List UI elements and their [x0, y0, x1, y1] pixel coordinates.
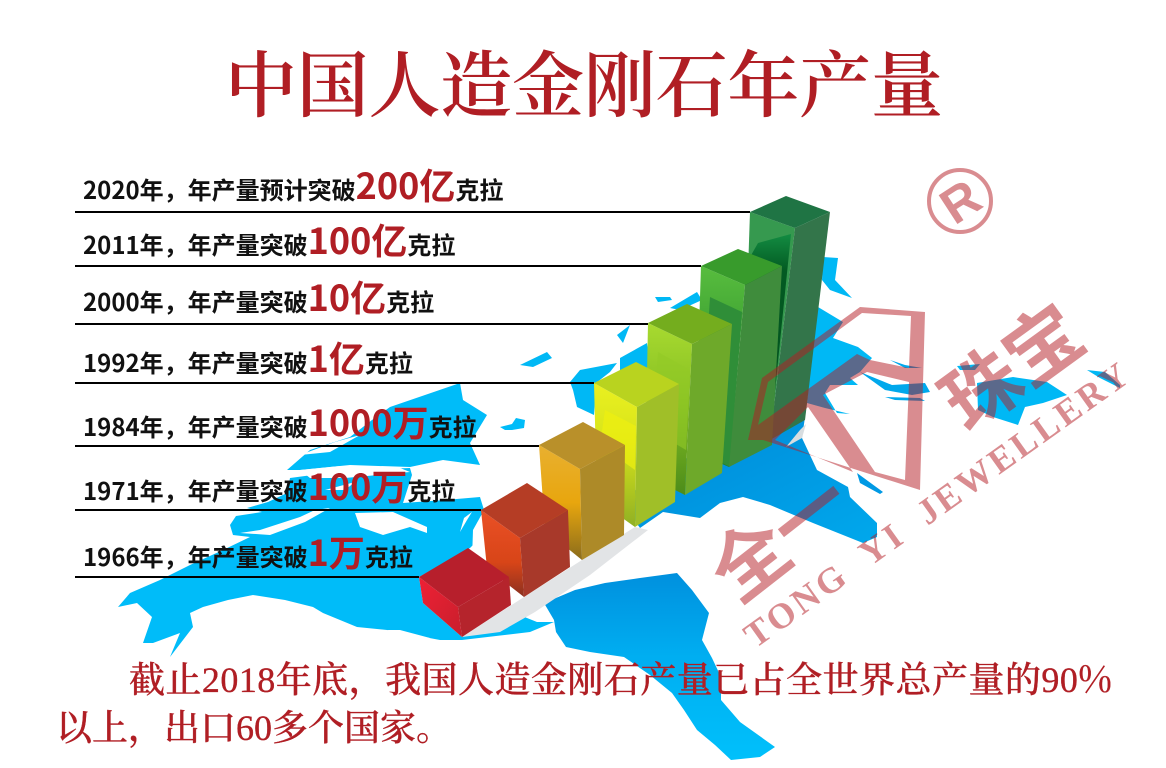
watermark: chinese brand left: 全一 [683, 442, 870, 622]
watermark: gem logo [748, 307, 925, 490]
map: strait strips [860, 360, 930, 401]
row lines and labels [75, 158, 750, 578]
row: 1971: 1971年，年产量突破100万克拉 [83, 459, 455, 511]
watermark: english brand: TONG YI JEWELLERY [736, 355, 1136, 656]
row: 1984: 1984年，年产量突破1000万克拉 [83, 395, 477, 447]
row: 1992: 1992年，年产量突破1亿克拉 [83, 331, 413, 383]
paragraph line 2: 以上，出口60多个国家。 [56, 708, 452, 748]
world map background [118, 257, 1120, 760]
map: hudson bay [355, 512, 427, 535]
bar 2: orange [481, 483, 570, 597]
row: 2011: 2011年，年产量突破100亿克拉 [83, 213, 455, 265]
bar 7: dark green [743, 196, 830, 440]
map: iceland [500, 418, 525, 430]
watermark [683, 169, 1136, 656]
summary paragraph [56, 652, 1112, 748]
bar 3: amber [539, 422, 625, 560]
row: 1966: 1966年，年产量突破1万克拉 [83, 525, 413, 577]
watermark: chinese brand right: 珠宝 [915, 273, 1103, 452]
map: eurasia under bars [620, 410, 877, 543]
shadow patch near tall bar [786, 424, 806, 447]
map: small islands [520, 257, 1120, 415]
map: australia-like island [977, 377, 1067, 425]
bar 1: red [419, 548, 511, 637]
3D bar chart [419, 196, 830, 637]
map: south america [544, 573, 775, 760]
map: eurasia peninsula [857, 473, 883, 494]
row: 2020: 2020年，年产量预计突破200亿克拉 [83, 158, 503, 210]
map: greenland [287, 383, 487, 470]
map: north america [118, 468, 554, 657]
row: 2000: 2000年，年产量突破10亿克拉 [83, 270, 434, 322]
paragraph line 1: 截止2018年底，我国人造金刚石产量已占全世界总产量的90% [129, 652, 1112, 703]
watermark: registered mark: R [930, 169, 991, 235]
title: 中国人造金刚石年产量 [225, 28, 943, 132]
map: white arctic streaks [240, 435, 486, 638]
bar 5: lime green [645, 304, 732, 495]
map: northern land right of bars [807, 307, 872, 414]
bars ground shadow [462, 527, 648, 637]
bar 6: green [695, 249, 782, 467]
bar 4: yellow [594, 362, 679, 527]
